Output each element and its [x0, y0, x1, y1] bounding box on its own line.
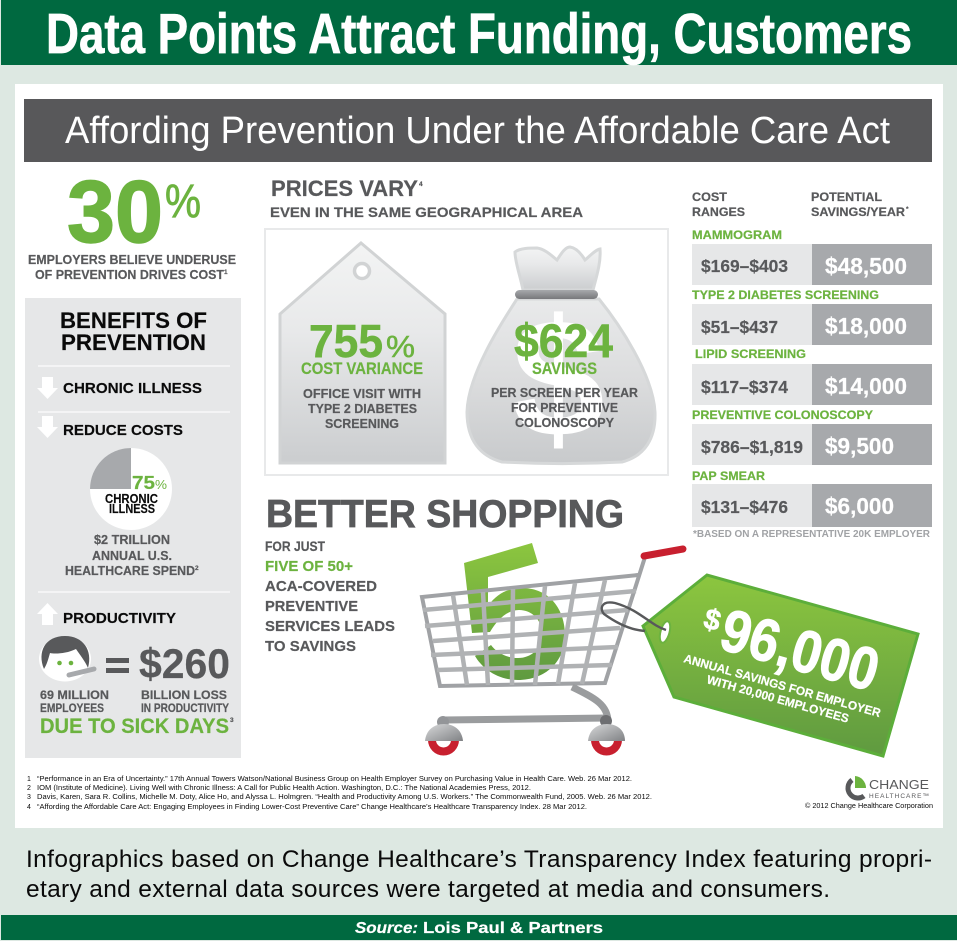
row: type 2 diabetes screening: $51–$437 — [701, 317, 778, 337]
money bag: $624 — [514, 314, 613, 367]
table headers: COST — [692, 190, 728, 204]
pie chart: 75 percent chronic illness: ILLNESS — [109, 502, 155, 516]
row: preventive colonoscopy: PREVENTIVE COLONOSCOPY — [692, 408, 873, 422]
heading: benefits of prevention — [60, 308, 207, 355]
row: mammogram: $48,500 — [825, 253, 907, 279]
equals sign — [106, 658, 129, 673]
footnotes: IOM (Institute of Medicine). Living Well with Chronic Illness: A Call for Public Health Action. Washington, D.C.: The National Academies Press, 2012. — [37, 785, 531, 792]
source bar — [1, 915, 957, 940]
chronic illness row: CHRONIC ILLNESS — [63, 380, 202, 397]
money bag: $ — [511, 284, 605, 472]
footnotes: “Affording the Affordable Care Act: Engaging Employees in Finding Lower-Cost Preventive Care” Change Healthcare’s Healthcare Transparency Index. 28 Mar 2012. — [37, 804, 587, 811]
text: five services: ACA-COVERED — [265, 578, 377, 595]
heading: prices vary — [270, 176, 583, 220]
table headers: POTENTIAL — [811, 190, 882, 204]
healthcare spend text: 2 — [195, 565, 199, 572]
footnotes: 2 — [27, 785, 31, 792]
heading: prices vary: 4 — [419, 181, 423, 188]
healthcare spend text: HEALTHCARE SPEND — [65, 564, 195, 578]
text: five services: TO SAVINGS — [265, 638, 356, 655]
row: pap smear — [692, 469, 932, 527]
reduce costs row: REDUCE COSTS — [63, 422, 183, 439]
heading: better shopping: BETTER SHOPPING — [266, 493, 624, 536]
price tag: TYPE 2 DIABETES — [308, 402, 417, 416]
row: lipid screening: $117–$374 — [701, 377, 788, 397]
source bar: Lois Paul & Partners — [423, 920, 603, 937]
pie chart: 75 percent chronic illness: 75 — [132, 473, 155, 493]
loss label: IN PRODUCTIVITY — [141, 703, 229, 715]
pie chart: 75 percent chronic illness: CHRONIC — [105, 492, 158, 506]
statistic: 30 percent: % — [165, 174, 201, 227]
employees label: EMPLOYEES — [40, 703, 104, 715]
money bag: PER SCREEN PER YEAR — [491, 386, 638, 400]
table headers: RANGES — [692, 205, 745, 219]
text: five services: FOR JUST — [265, 538, 325, 554]
cart handle — [644, 549, 683, 556]
caption text: Infographics based on Change Healthcare’s Transparency Index featuring propri- — [26, 846, 932, 873]
text: five services — [265, 538, 395, 655]
statistic: 30 percent: EMPLOYERS BELIEVE UNDERUSE — [28, 253, 236, 267]
money bag: COLONOSCOPY — [515, 416, 615, 430]
chronic illness row — [37, 377, 202, 399]
icon: sick employee face — [39, 636, 94, 682]
heading: benefits of prevention: BENEFITS OF — [60, 308, 207, 333]
price tag: 755 — [309, 315, 383, 367]
footnotes: 4 — [27, 804, 31, 811]
table headers: * — [906, 206, 909, 213]
savings tag: 96,000 dollars — [602, 575, 918, 756]
productivity row — [37, 603, 176, 627]
tag string — [602, 602, 666, 631]
footnotes — [27, 776, 652, 811]
money bag: FOR PREVENTIVE — [511, 401, 618, 415]
title bar: Affording Prevention Under the Affordable Care Act — [65, 110, 890, 152]
heading: prices vary: EVEN IN THE SAME GEOGRAPHICAL AREA — [270, 204, 583, 220]
white card — [15, 84, 943, 828]
right wheel — [588, 715, 625, 756]
footnotes: 3 — [27, 794, 31, 801]
panel: prices vary — [265, 229, 668, 475]
big green 5 — [464, 543, 565, 680]
illustration: shopping cart with big 5 — [422, 543, 683, 756]
money bag: SAVINGS — [532, 360, 597, 378]
healthcare spend text: ANNUAL U.S. — [92, 549, 172, 563]
savings tag: 96,000 dollars: ANNUAL SAVINGS FOR EMPLOYER — [682, 651, 883, 720]
price tag: SCREENING — [325, 417, 399, 431]
row: preventive colonoscopy: $786–$1,819 — [701, 437, 803, 457]
pie chart: 75 percent chronic illness — [90, 448, 172, 530]
due to sick days: 3 — [230, 717, 234, 724]
left wheel — [425, 716, 463, 756]
table headers — [692, 190, 909, 219]
row: type 2 diabetes screening — [692, 288, 932, 345]
logo: change healthcare: CHANGE — [869, 777, 929, 792]
loss label — [141, 688, 229, 715]
savings tag: 96,000 dollars: WITH 20,000 EMPLOYEES — [705, 672, 850, 726]
heading: benefits of prevention: PREVENTION — [61, 330, 206, 355]
text: five services: FIVE OF 50+ — [265, 558, 353, 575]
row: lipid screening — [692, 347, 932, 405]
caption text: etary and external data sources were targeted at media and consumers. — [26, 876, 830, 903]
due to sick days: DUE TO SICK DAYS — [40, 715, 229, 738]
footnotes: Davis, Karen, Sara R. Collins, Michelle M. Doty, Alice Ho, and Alyssa L. Holmgren. “Health and Productivity Among U.S. Workers.” The Commonwealth Fund, 2005. Web. 26 Mar 2012. — [37, 794, 652, 801]
row: lipid screening: LIPID SCREENING — [695, 347, 806, 361]
row: preventive colonoscopy: $9,500 — [825, 433, 894, 459]
price tag: OFFICE VISIT WITH — [303, 387, 421, 401]
footnotes: 1 — [27, 776, 31, 783]
source bar: Source: — [355, 920, 418, 937]
row: pap smear: $131–$476 — [701, 497, 788, 517]
row: mammogram: $169–$403 — [701, 256, 788, 276]
productivity row: PRODUCTIVITY — [63, 610, 176, 627]
table footnote: *BASED ON A REPRESENTATIVE 20K EMPLOYER — [693, 528, 930, 540]
reduce costs row — [37, 416, 183, 439]
footnotes: “Performance in an Era of Uncertainty.” 17th Annual Towers Watson/National Business Group on Health Employer Survey on Purchasing Value in Health Care. Web. 26 Mar 2012. — [37, 776, 632, 783]
statistic: 260 dollars: $260 — [139, 640, 230, 687]
row: lipid screening: $14,000 — [825, 373, 907, 399]
caption text — [26, 846, 932, 903]
employees label: 69 MILLION — [40, 688, 109, 702]
row: mammogram: MAMMOGRAM — [692, 228, 782, 242]
text: five services: PREVENTIVE — [265, 598, 358, 615]
statistic: 30 percent: 1 — [224, 269, 228, 276]
savings tag: 96,000 dollars: 96,000 — [713, 596, 887, 704]
employees label — [40, 688, 109, 715]
row: preventive colonoscopy — [692, 408, 932, 465]
title bar — [24, 99, 932, 162]
table headers: SAVINGS/YEAR — [811, 205, 905, 219]
heading: prices vary: PRICES VARY — [271, 176, 418, 201]
row: pap smear: PAP SMEAR — [692, 469, 765, 483]
logo: change healthcare: HEALTHCARE™ — [869, 793, 929, 800]
loss label: BILLION LOSS — [141, 688, 227, 702]
panel: benefits of prevention — [25, 298, 241, 758]
savings tag: 96,000 dollars: $ — [700, 603, 724, 638]
price tag: % — [386, 329, 415, 364]
price tag: COST VARIANCE — [301, 360, 423, 378]
statistic: 30 percent: OF PREVENTION DRIVES COST — [35, 268, 224, 282]
text: five services: SERVICES LEADS — [265, 618, 395, 635]
statistic: 30 percent — [28, 162, 236, 282]
cart frame — [443, 687, 608, 722]
money bag — [467, 247, 655, 472]
logo: change healthcare: © 2012 Change Healthcare Corporation — [805, 802, 933, 810]
table: cost ranges and savings — [692, 190, 932, 540]
statistic: 30 percent: 30 — [67, 162, 163, 261]
price tag — [280, 243, 445, 463]
healthcare spend text — [65, 533, 199, 578]
healthcare spend text: $2 TRILLION — [94, 533, 170, 547]
row: type 2 diabetes screening: TYPE 2 DIABETES SCREENING — [692, 288, 879, 302]
row: mammogram — [692, 228, 932, 285]
row: pap smear: $6,000 — [825, 493, 894, 519]
pie chart: 75 percent chronic illness: % — [155, 477, 167, 492]
cart basket — [422, 557, 645, 686]
logo: change healthcare — [805, 776, 933, 810]
row: type 2 diabetes screening: $18,000 — [825, 313, 907, 339]
